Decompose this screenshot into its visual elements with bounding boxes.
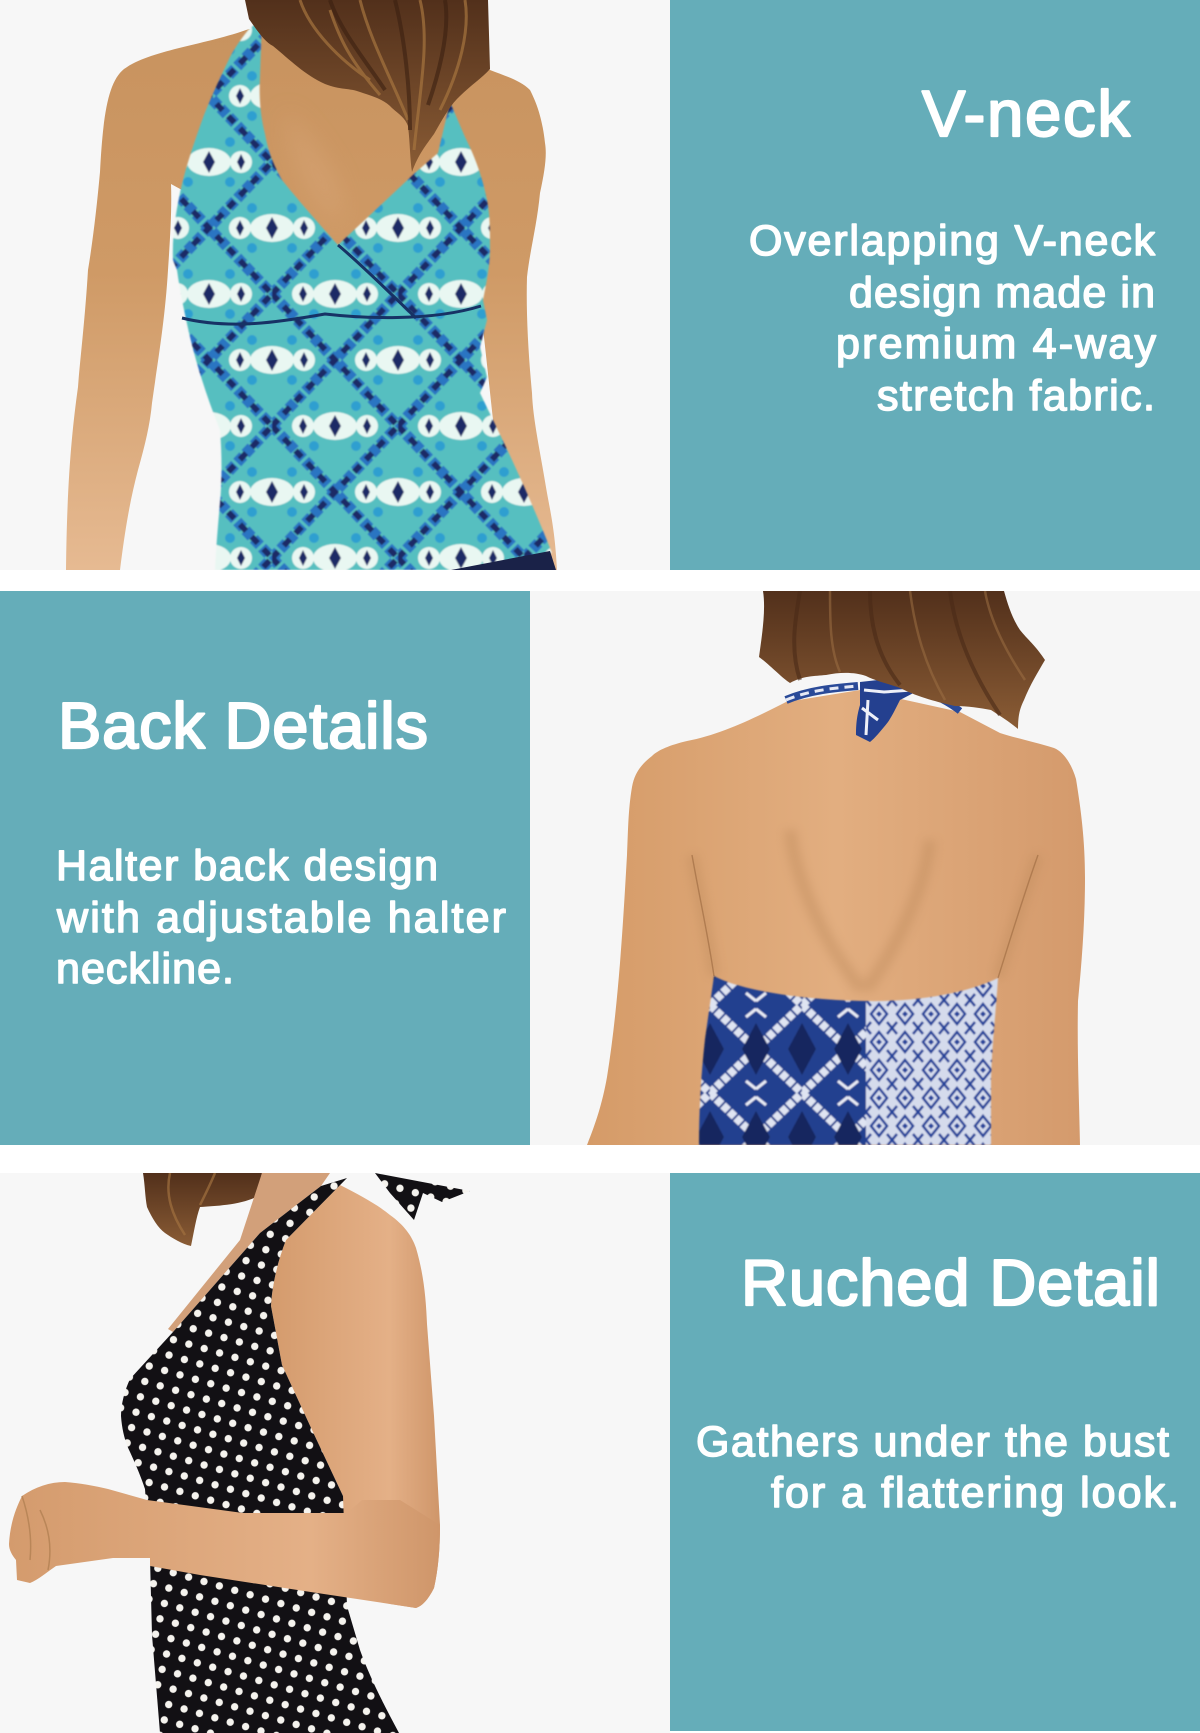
torso garment: turquoise ikat halter top — [173, 19, 552, 570]
skin: upper arm and back — [271, 1185, 440, 1608]
skin: back and arms — [587, 690, 1085, 1145]
text block: v-neck description: stretch fabric. — [877, 372, 1155, 420]
hair — [143, 1173, 262, 1246]
panel: back details text — [0, 591, 530, 1145]
text block: back details description: neckline. — [56, 945, 234, 993]
text block: back details description: with adjustable halter — [56, 894, 506, 942]
panel: ruched detail text — [670, 1173, 1200, 1731]
neck strap and knot — [786, 680, 960, 742]
text block: v-neck description: Overlapping V-neck — [749, 217, 1156, 265]
text block: v-neck description: premium 4-way — [836, 320, 1156, 368]
panel: v-neck photo — [66, 0, 557, 570]
text block: ruched detail description — [696, 1418, 1179, 1517]
hair — [245, 0, 490, 172]
garment: blue tie-dye back — [699, 976, 998, 1145]
text block: v-neck description — [749, 217, 1156, 420]
text block: ruched detail description: Gathers under the bust — [696, 1418, 1169, 1466]
garment: black polka dot halter — [121, 1178, 399, 1733]
text block: v-neck description: design made in — [849, 269, 1155, 317]
forearm and hand — [9, 1482, 440, 1608]
skin: shoulders, chest and arms — [66, 29, 557, 570]
chest highlight — [308, 158, 327, 192]
text block: back details description: Halter back design — [56, 842, 438, 890]
panel: back details photo — [530, 591, 1200, 1145]
text block: back details description — [56, 842, 506, 993]
navy swim bottom — [451, 551, 556, 570]
panel: ruched detail photo — [9, 1173, 470, 1733]
panel: v-neck text — [670, 0, 1200, 570]
back muscle shading — [692, 830, 1038, 990]
heading: Back Details: Back Details — [58, 689, 428, 762]
neck and chest skin — [168, 1173, 330, 1332]
heading: Ruched Detail: Ruched Detail — [741, 1246, 1160, 1319]
text block: ruched detail description: for a flattering look. — [771, 1469, 1179, 1517]
heading: V-neck: V-neck — [922, 77, 1130, 150]
halter tie — [375, 1173, 470, 1220]
hair — [759, 591, 1045, 729]
bust seam and wrap lines — [182, 245, 481, 324]
